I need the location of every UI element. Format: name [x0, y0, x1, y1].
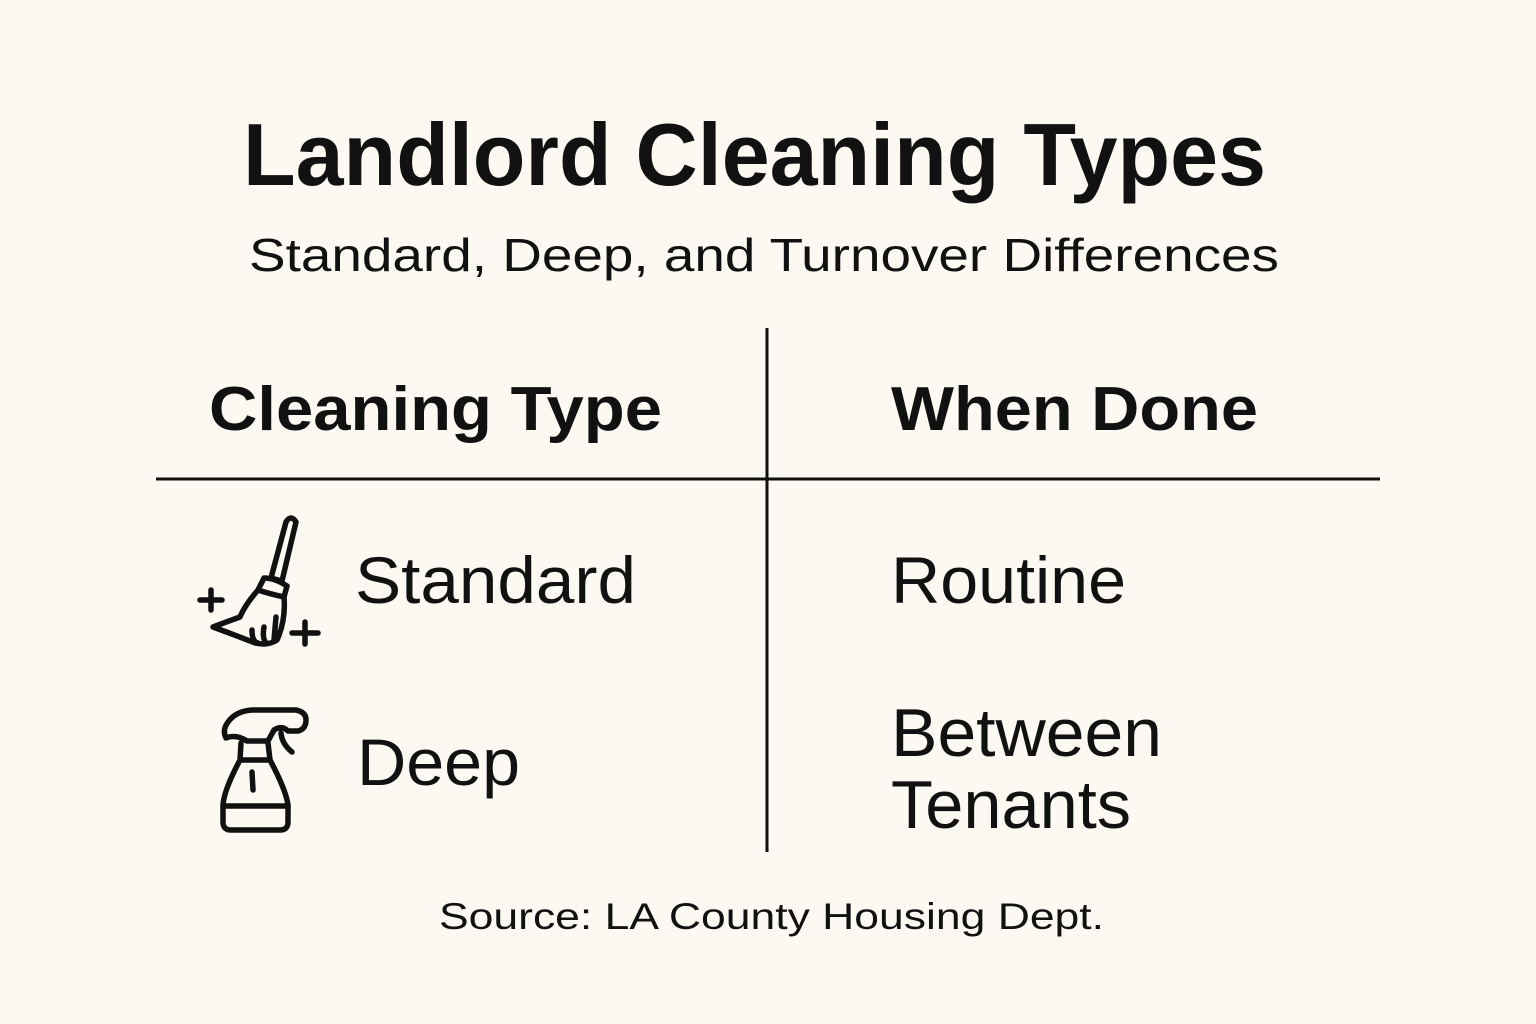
title: Landlord Cleaning Types — [243, 105, 1266, 204]
icon: spray bottle — [223, 710, 306, 830]
source: Source: LA County Housing Dept. — [439, 896, 1104, 937]
row value: routine: Routine — [891, 543, 1126, 617]
row value: between tenants: Tenants — [891, 767, 1131, 843]
icon: broom — [200, 518, 318, 644]
header: cleaning type: Cleaning Type — [209, 375, 662, 444]
subtitle: Standard, Deep, and Turnover Differences — [249, 229, 1279, 281]
row value: between tenants — [891, 695, 1162, 843]
table — [156, 328, 1380, 852]
row label: standard: Standard — [355, 543, 636, 617]
row value: between tenants: Between — [891, 695, 1162, 771]
row label: deep: Deep — [357, 725, 520, 799]
header: when done: When Done — [891, 375, 1258, 444]
